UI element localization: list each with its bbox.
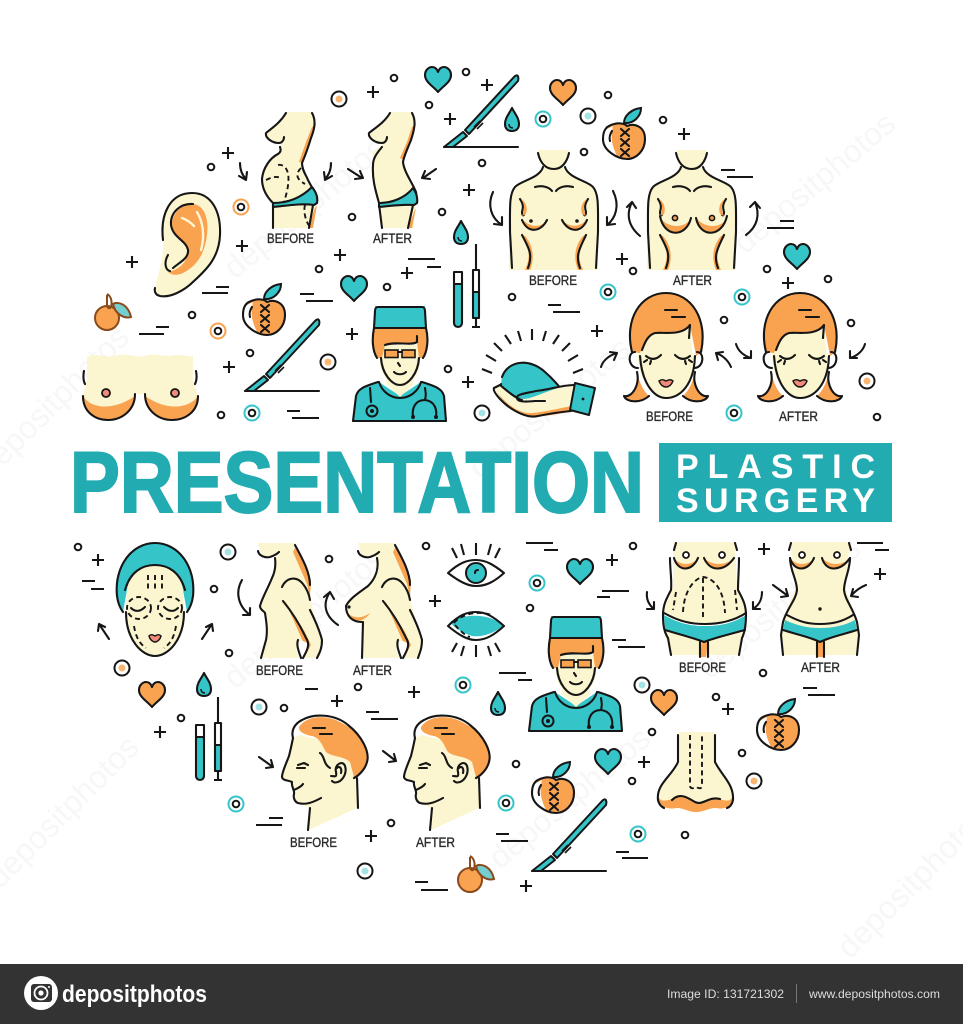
- icon: torso front after: [781, 542, 859, 675]
- icon: scalpel 3: [532, 799, 606, 871]
- watermarks: depositphotos: [726, 105, 902, 260]
- icon: apple 4: [532, 762, 574, 813]
- icon: eye open: [448, 543, 504, 586]
- title badge: PLASTIC SURGERY: PLASTIC: [676, 448, 875, 486]
- icon: vials and syringe 2: [196, 697, 222, 780]
- label after: AFTER: [673, 272, 712, 288]
- icon: apple 2: [243, 284, 285, 335]
- icon: nose: [658, 732, 733, 812]
- icon: woman face after: [758, 293, 842, 424]
- icon: scalpel 1: [444, 75, 518, 147]
- icon: side body after: [345, 543, 422, 678]
- icon: side body before: [256, 543, 322, 678]
- icon: chest before: [509, 150, 598, 288]
- icon: woman face before: [624, 293, 708, 424]
- watermarks: depositphotos: [461, 330, 637, 485]
- icon: torso front before: [663, 542, 746, 675]
- label after: AFTER: [416, 834, 455, 850]
- title badge: PLASTIC SURGERY: [659, 443, 892, 522]
- label before: BEFORE: [529, 272, 577, 288]
- icon: scalpel 2: [245, 319, 319, 391]
- icon: implant in hand: [482, 329, 595, 417]
- watermarks: depositphotos: [216, 540, 392, 695]
- icon: surgeon 1: [353, 306, 446, 421]
- watermarks: depositphotos: [481, 720, 657, 875]
- label before: BEFORE: [679, 659, 726, 675]
- icons: drops: [197, 108, 519, 715]
- watermarks: depositphotos: [691, 530, 867, 685]
- icon: small fruit 2: [458, 856, 494, 892]
- icon: ear: [155, 193, 220, 296]
- rays: [482, 329, 583, 373]
- icons: teal hearts: [341, 67, 810, 774]
- decorative target rings: [114, 92, 874, 878]
- icon: male head after: [404, 716, 490, 850]
- decorative dashes: [82, 170, 889, 890]
- label before: BEFORE: [646, 408, 693, 424]
- watermarks: depositphotos: [216, 130, 392, 285]
- footer bar: [0, 964, 963, 1024]
- icon: depositphotos camera logo: [24, 976, 58, 1010]
- label after: AFTER: [373, 230, 412, 246]
- icon: small fruit 1: [95, 294, 131, 330]
- icon: male head before: [282, 716, 368, 850]
- divider: [796, 984, 797, 1003]
- icon: chest after: [647, 150, 736, 288]
- icon: face with surgery markings: [117, 543, 193, 656]
- label after: AFTER: [801, 659, 840, 675]
- label after: AFTER: [779, 408, 818, 424]
- image id: Image ID: 131721302: [667, 987, 784, 1001]
- arrows: [98, 163, 866, 768]
- icon: surgeon 2: [529, 616, 622, 731]
- icon: side torso before: [262, 112, 317, 246]
- icons: orange hearts: [139, 80, 677, 715]
- footer logo text: depositphotos: [62, 981, 207, 1008]
- decorative plus signs: [92, 79, 886, 892]
- label after: AFTER: [353, 662, 392, 678]
- title: PRESENTATION: PRESENTATION: [70, 435, 644, 531]
- label before: BEFORE: [267, 230, 314, 246]
- icon: eye closed with markings: [448, 612, 504, 657]
- icon: breasts: [83, 355, 198, 420]
- icon: side torso after: [368, 112, 417, 246]
- decorative small rings: [75, 69, 880, 838]
- icon: apple 1: [603, 108, 645, 159]
- icon: apple 3: [757, 699, 799, 750]
- label before: BEFORE: [290, 834, 337, 850]
- website: www.depositphotos.com: [808, 987, 940, 1001]
- icon: vials and syringe 1: [454, 244, 480, 327]
- title badge: PLASTIC SURGERY: SURGERY: [676, 482, 875, 520]
- label before: BEFORE: [256, 662, 303, 678]
